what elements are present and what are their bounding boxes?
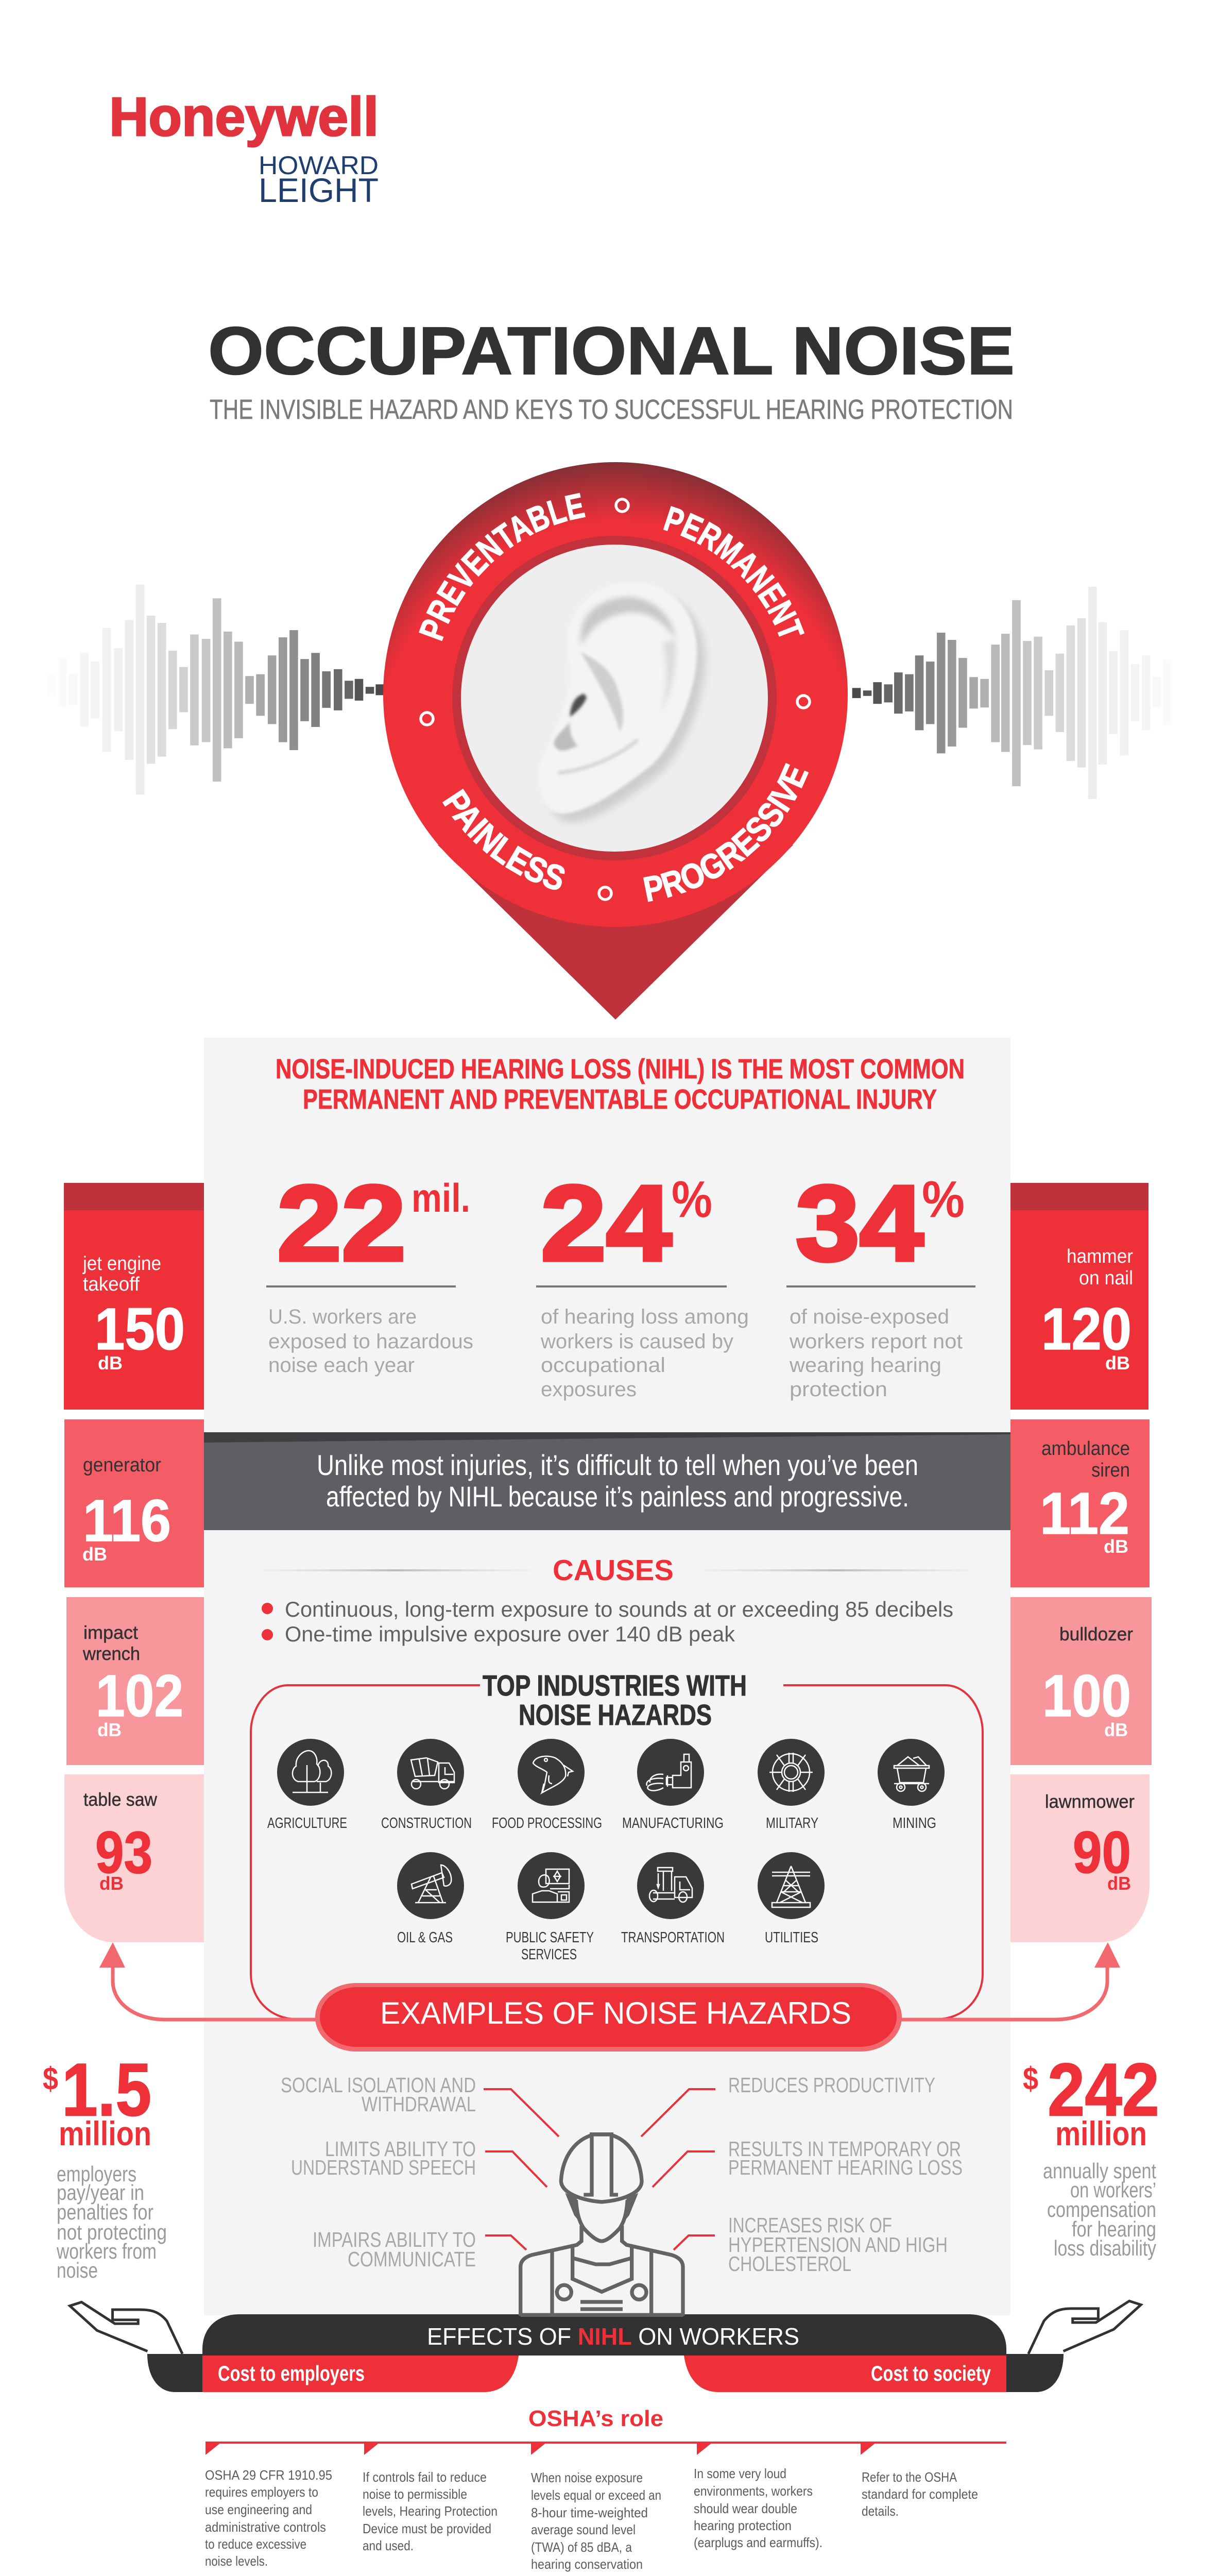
OSHA column 4: should wear double (694, 2501, 797, 2516)
block: table saw 93 dB (64, 1774, 204, 1942)
OSHA column 5: details. (862, 2503, 899, 2519)
stat: 24 percent: exposures (541, 1378, 637, 1401)
logo: Honeywell Howard Leight (109, 87, 379, 209)
industries labels (267, 1815, 936, 1963)
cost: 1.5 million to employers: pay/year in (57, 2180, 144, 2205)
block: ambulance siren 112 dB: 112 (1040, 1481, 1129, 1547)
cost: 1.5 million to employers: noise (57, 2258, 98, 2282)
cost: 1.5 million to employers: employers (57, 2162, 136, 2186)
headline: NIHL most common injury: NOISE-INDUCED HEARING LOSS (NIHL) IS THE MOST COMMON (276, 1054, 965, 1084)
noise level blocks right (1010, 1183, 1152, 1942)
ear pin badge (383, 462, 848, 1020)
cost: 242 million to society: annually spent (1043, 2159, 1156, 2183)
block: table saw 93 dB: table saw (83, 1789, 158, 1810)
ring words: PAINLESS (442, 788, 564, 890)
OSHA column 5 (862, 2469, 978, 2519)
block: bulldozer 100 dB (1010, 1597, 1152, 1765)
cost: 1.5 million to employers: $ (43, 2061, 58, 2097)
tab: cost to society (684, 2355, 1006, 2392)
stat: 34 percent (786, 1164, 975, 1401)
statistics row (266, 1164, 975, 1401)
logo: Honeywell Howard Leight: HOWARD (259, 151, 379, 180)
block: impact wrench 102 dB: 102 (96, 1663, 183, 1729)
ring words: PERMANENT (663, 506, 804, 637)
OSHA column 2: If controls fail to reduce (363, 2469, 487, 2485)
icon: military (758, 1739, 825, 1806)
cost: 1.5 million to employers: million (59, 2114, 151, 2153)
stat: 24 percent: of hearing loss among (541, 1306, 749, 1328)
heading: top industries: NOISE HAZARDS (519, 1699, 712, 1732)
sound wave left (46, 585, 384, 794)
heading: top industries (483, 1669, 747, 1732)
panel: main gray background (204, 1038, 1010, 2315)
icon: left hand (70, 2302, 202, 2392)
OSHA column 3: When noise exposure (531, 2470, 643, 2485)
block: impact wrench 102 dB: dB (97, 1719, 122, 1740)
OSHA column 3: average sound level (531, 2522, 636, 2537)
block: ambulance siren 112 dB (1010, 1419, 1150, 1587)
effects labels right: CHOLESTEROL (728, 2252, 851, 2276)
block: jet engine takeoff 150 dB: takeoff (83, 1274, 140, 1295)
block: hammer on nail 120 dB: hammer (1067, 1246, 1133, 1267)
cost: 1.5 million to employers: 1.5 (62, 2048, 151, 2131)
effects labels left: WITHDRAWAL (362, 2092, 476, 2116)
heading: OSHA's role: OSHA’s role (528, 2406, 663, 2431)
stat: 22 million (266, 1164, 473, 1377)
block: lawnmower 90 dB: dB (1107, 1873, 1131, 1894)
inner dark ring (452, 536, 777, 860)
block: ambulance siren 112 dB: dB (1104, 1536, 1128, 1557)
cost: 242 million to society: million (1055, 2114, 1147, 2153)
block: generator 116 dB: dB (82, 1544, 107, 1565)
headline: NIHL most common injury: PERMANENT AND PREVENTABLE OCCUPATIONAL INJURY (303, 1084, 937, 1115)
effects labels left (281, 2073, 476, 2271)
OSHA text columns (205, 2466, 978, 2576)
block: lawnmower 90 dB: 90 (1073, 1820, 1131, 1886)
pin tail (438, 845, 793, 1020)
stat: 22 million: noise each year (268, 1354, 415, 1377)
banner: painless and progressive: Unlike most injuries, it’s difficult to tell when you’ve been (317, 1449, 918, 1481)
OSHA timeline rule (205, 2442, 1006, 2455)
stat: 24 percent: % (672, 1171, 712, 1228)
block: bulldozer 100 dB: dB (1104, 1719, 1128, 1740)
OSHA column 1: requires employers to (205, 2484, 318, 2500)
industries labels: PUBLIC SAFETY (506, 1929, 594, 1946)
icon: oil and gas (397, 1852, 464, 1919)
block: bulldozer 100 dB: 100 (1042, 1663, 1131, 1729)
effects labels right (728, 2073, 963, 2276)
stat: 22 million: mil. (412, 1175, 470, 1221)
effects labels left: LIMITS ABILITY TO (325, 2137, 476, 2161)
effects labels left: IMPAIRS ABILITY TO (313, 2228, 476, 2251)
causes list: Continuous, long-term exposure to sounds at or exceeding 85 decibels (285, 1597, 953, 1621)
stat: 24 percent: workers is caused by (540, 1330, 733, 1353)
OSHA column 4 (694, 2466, 822, 2550)
industries labels: TRANSPORTATION (621, 1929, 725, 1946)
OSHA column 4: hearing protection (694, 2518, 792, 2533)
OSHA column 5: Refer to the OSHA (862, 2469, 957, 2485)
block: hammer on nail 120 dB (1010, 1183, 1149, 1410)
industries labels: MINING (893, 1815, 936, 1832)
industries labels: SERVICES (521, 1946, 577, 1963)
frame: top industries outline (251, 1685, 983, 2019)
cost: 242 million to society: $ (1023, 2061, 1038, 2097)
industries labels: OIL & GAS (397, 1929, 453, 1946)
block: jet engine takeoff 150 dB: jet engine (82, 1253, 161, 1275)
OSHA column 3: levels equal or exceed an (531, 2487, 661, 2503)
industries labels: AGRICULTURE (267, 1815, 347, 1832)
bar: effects of NIHL on workers (202, 2314, 1006, 2355)
OSHA column 1 (205, 2467, 332, 2569)
OSHA column 1: administrative controls (205, 2519, 326, 2535)
industries labels: MILITARY (766, 1815, 818, 1832)
cost: 242 million to society: for hearing (1072, 2217, 1156, 2241)
OSHA column 4: (earplugs and earmuffs). (694, 2535, 822, 2550)
block: table saw 93 dB: dB (99, 1873, 124, 1894)
ring words: PROGRESSIVE (643, 762, 809, 902)
block: impact wrench 102 dB: wrench (82, 1643, 140, 1664)
block: bulldozer 100 dB: bulldozer (1059, 1623, 1133, 1645)
block: impact wrench 102 dB: impact (83, 1622, 138, 1643)
OSHA column 3: hearing conservation (531, 2556, 643, 2572)
cost: 242 million to society: on workers’ (1070, 2178, 1156, 2202)
icon: agriculture (277, 1739, 344, 1806)
block: hammer on nail 120 dB: dB (1105, 1352, 1130, 1374)
icon: construction (397, 1739, 464, 1806)
small ring circles (421, 499, 810, 900)
icon: utilities (758, 1852, 825, 1919)
OSHA column 2: noise to permissible (363, 2486, 467, 2502)
icon: public safety services (518, 1852, 585, 1919)
OSHA column 2: levels, Hearing Protection (363, 2503, 498, 2519)
OSHA column 1: noise levels. (205, 2553, 268, 2569)
OSHA column 2 (363, 2469, 498, 2553)
bar: effects of NIHL on workers: EFFECTS OF NIHL ON WORKERS (427, 2323, 799, 2350)
stat: 34 percent: % (922, 1171, 965, 1228)
subtitle: THE INVISIBLE HAZARD AND KEYS TO SUCCESSFUL HEARING PROTECTION (210, 394, 1013, 425)
OSHA column 1: use engineering and (205, 2502, 312, 2517)
stat: 22 million: 22 (277, 1164, 406, 1283)
effects labels left: SOCIAL ISOLATION AND (281, 2073, 476, 2097)
effects leader lines (484, 2089, 715, 2250)
icon: transportation (637, 1852, 704, 1919)
block: jet engine takeoff 150 dB: dB (98, 1352, 123, 1374)
block: hammer on nail 120 dB: on nail (1079, 1267, 1133, 1289)
block: impact wrench 102 dB (66, 1597, 204, 1765)
industries labels: CONSTRUCTION (381, 1815, 472, 1832)
heading: top industries: TOP INDUSTRIES WITH (483, 1669, 747, 1702)
industries labels: FOOD PROCESSING (492, 1815, 602, 1832)
stat: 24 percent: 24 (541, 1164, 672, 1283)
cost: 1.5 million to employers (43, 2048, 167, 2282)
icon: worker (521, 2132, 683, 2316)
industries icons (277, 1739, 945, 1919)
stat: 34 percent: of noise-exposed (790, 1306, 949, 1328)
stat: 24 percent (536, 1164, 749, 1401)
headline: NIHL most common injury (276, 1054, 965, 1115)
cost: 242 million to society: loss disability (1054, 2236, 1156, 2260)
banner: painless and progressive (204, 1432, 1010, 1530)
cost: 1.5 million to employers: workers from (56, 2239, 157, 2263)
ring words: PREVENTABLE (419, 493, 586, 641)
OSHA column 1: OSHA 29 CFR 1910.95 (205, 2467, 332, 2483)
effects labels right: INCREASES RISK OF (728, 2213, 892, 2237)
causes list (262, 1597, 953, 1646)
tab: cost to employers: Cost to employers (218, 2361, 365, 2385)
cost: 1.5 million to employers: not protecting (57, 2220, 167, 2244)
cost: 242 million to society: 242 (1048, 2048, 1159, 2131)
cost: 242 million to society: compensation (1047, 2197, 1156, 2222)
causes list: One-time impulsive exposure over 140 dB peak (285, 1622, 735, 1646)
stat: 34 percent: workers report not (789, 1330, 963, 1353)
OSHA column 5: standard for complete (862, 2486, 978, 2502)
tab: cost to employers (202, 2355, 519, 2392)
effects labels right: RESULTS IN TEMPORARY OR (728, 2137, 961, 2161)
OSHA column 3 (531, 2470, 661, 2576)
block: jet engine takeoff 150 dB: 150 (95, 1296, 185, 1362)
banner: painless and progressive: affected by NIHL because it’s painless and progressive. (326, 1480, 909, 1513)
stat: 22 million: exposed to hazardous (268, 1330, 473, 1353)
OSHA column 4: environments, workers (694, 2483, 813, 2499)
OSHA column 2: Device must be provided (363, 2521, 491, 2536)
block: generator 116 dB: generator (83, 1454, 161, 1476)
arrow: to left decibel blocks (99, 1942, 330, 2020)
effects labels right: REDUCES PRODUCTIVITY (728, 2073, 935, 2097)
block: hammer on nail 120 dB: 120 (1041, 1296, 1132, 1362)
icon: manufacturing (637, 1739, 704, 1806)
noise level blocks left (64, 1183, 204, 1942)
OSHA column 2: and used. (363, 2538, 414, 2553)
block: ambulance siren 112 dB: ambulance (1041, 1438, 1130, 1460)
cost: 242 million to society (1023, 2048, 1159, 2260)
industries labels: UTILITIES (765, 1929, 818, 1946)
button: examples of noise hazards (315, 1983, 902, 2052)
block: generator 116 dB (64, 1419, 204, 1587)
block: lawnmower 90 dB (1010, 1774, 1150, 1942)
heading: causes (262, 1554, 970, 1587)
red ring (383, 462, 848, 927)
stat: 24 percent: occupational (541, 1354, 665, 1377)
icon: right hand (1006, 2301, 1141, 2392)
effects labels right: HYPERTENSION AND HIGH (728, 2233, 948, 2257)
icon: food processing (518, 1739, 585, 1806)
sound wave right (852, 587, 1172, 799)
industries labels: MANUFACTURING (622, 1815, 724, 1832)
tab: cost to society: Cost to society (871, 2361, 991, 2385)
block: jet engine takeoff 150 dB (64, 1183, 204, 1410)
OSHA column 3: 8-hour time-weighted (531, 2505, 648, 2520)
icon: mining (878, 1739, 945, 1806)
ear illustration (538, 582, 706, 822)
ring words (419, 493, 809, 902)
OSHA column 1: to reduce excessive (205, 2536, 306, 2552)
effects labels right: PERMANENT HEARING LOSS (728, 2156, 963, 2179)
title: OCCUPATIONAL NOISE (208, 313, 1015, 388)
ear background disc (461, 545, 768, 852)
OSHA column 3: (TWA) of 85 dBA, a (531, 2539, 632, 2555)
block: generator 116 dB: 116 (83, 1488, 171, 1554)
logo: Honeywell Howard Leight: Honeywell (109, 87, 379, 147)
stat: 22 million: U.S. workers are (268, 1306, 417, 1328)
effects labels left: COMMUNICATE (348, 2247, 476, 2271)
stat: 34 percent: wearing hearing (789, 1354, 941, 1377)
stat: 34 percent: 34 (796, 1164, 923, 1283)
effects labels left: UNDERSTAND SPEECH (291, 2156, 476, 2179)
block: ambulance siren 112 dB: siren (1091, 1460, 1130, 1481)
heading: causes: CAUSES (553, 1554, 674, 1587)
stat: 34 percent: protection (790, 1378, 887, 1401)
button: examples of noise hazards: EXAMPLES OF NOISE HAZARDS (380, 1996, 851, 2030)
block: lawnmower 90 dB: lawnmower (1045, 1791, 1135, 1812)
OSHA column 4: In some very loud (694, 2466, 786, 2481)
block: table saw 93 dB: 93 (95, 1820, 152, 1886)
arrow: to right decibel blocks (886, 1942, 1120, 2020)
logo: Honeywell Howard Leight: LEIGHT (259, 171, 379, 209)
cost: 1.5 million to employers: penalties for (57, 2200, 153, 2224)
